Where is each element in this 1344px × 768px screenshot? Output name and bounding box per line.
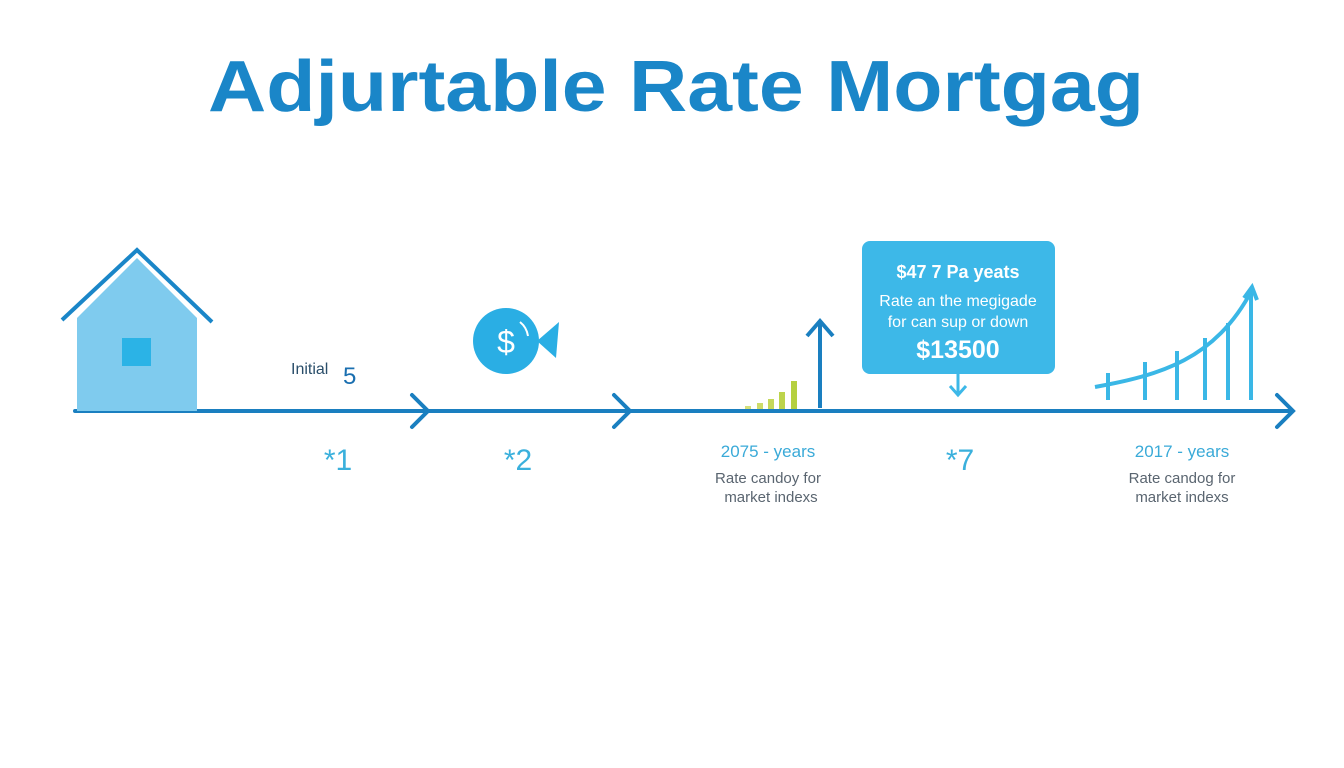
text block: 2075 years [715,442,821,506]
step labels: *7 [946,444,974,477]
text block: 2075 years: 2075 - years [721,442,815,461]
callout box [862,241,1055,395]
label: initial 5: 5 [343,363,356,390]
text block: 2075 years: Rate candoy for [715,470,821,487]
icon: dollar coin [473,308,559,374]
icon: house [62,250,212,411]
callout box: $13500 [916,336,1000,364]
text block: 2017 years [1129,442,1235,506]
step labels: *1 [324,444,352,477]
label: initial 5 [291,361,356,390]
text block: 2017 years: Rate candog for [1129,470,1235,487]
callout box: Rate an the megigade [879,293,1037,310]
callout box: $47 7 Pa yeats [896,262,1020,282]
text block: 2017 years: market indexs [1135,489,1229,506]
step labels [324,444,974,477]
callout box: for can sup or down [888,314,1028,331]
text block: 2017 years: 2017 - years [1135,442,1229,461]
step labels: *2 [504,444,532,477]
chart: rising bars with curve [1095,287,1257,400]
title: Adjurtable Rate Mortgag [208,47,1144,127]
label: initial 5: Initial [291,361,328,378]
chart: small green bars and up arrow [745,321,833,409]
icon: dollar coin: $ [497,324,515,360]
text block: 2075 years: market indexs [724,489,818,506]
timeline axis [75,395,1293,427]
